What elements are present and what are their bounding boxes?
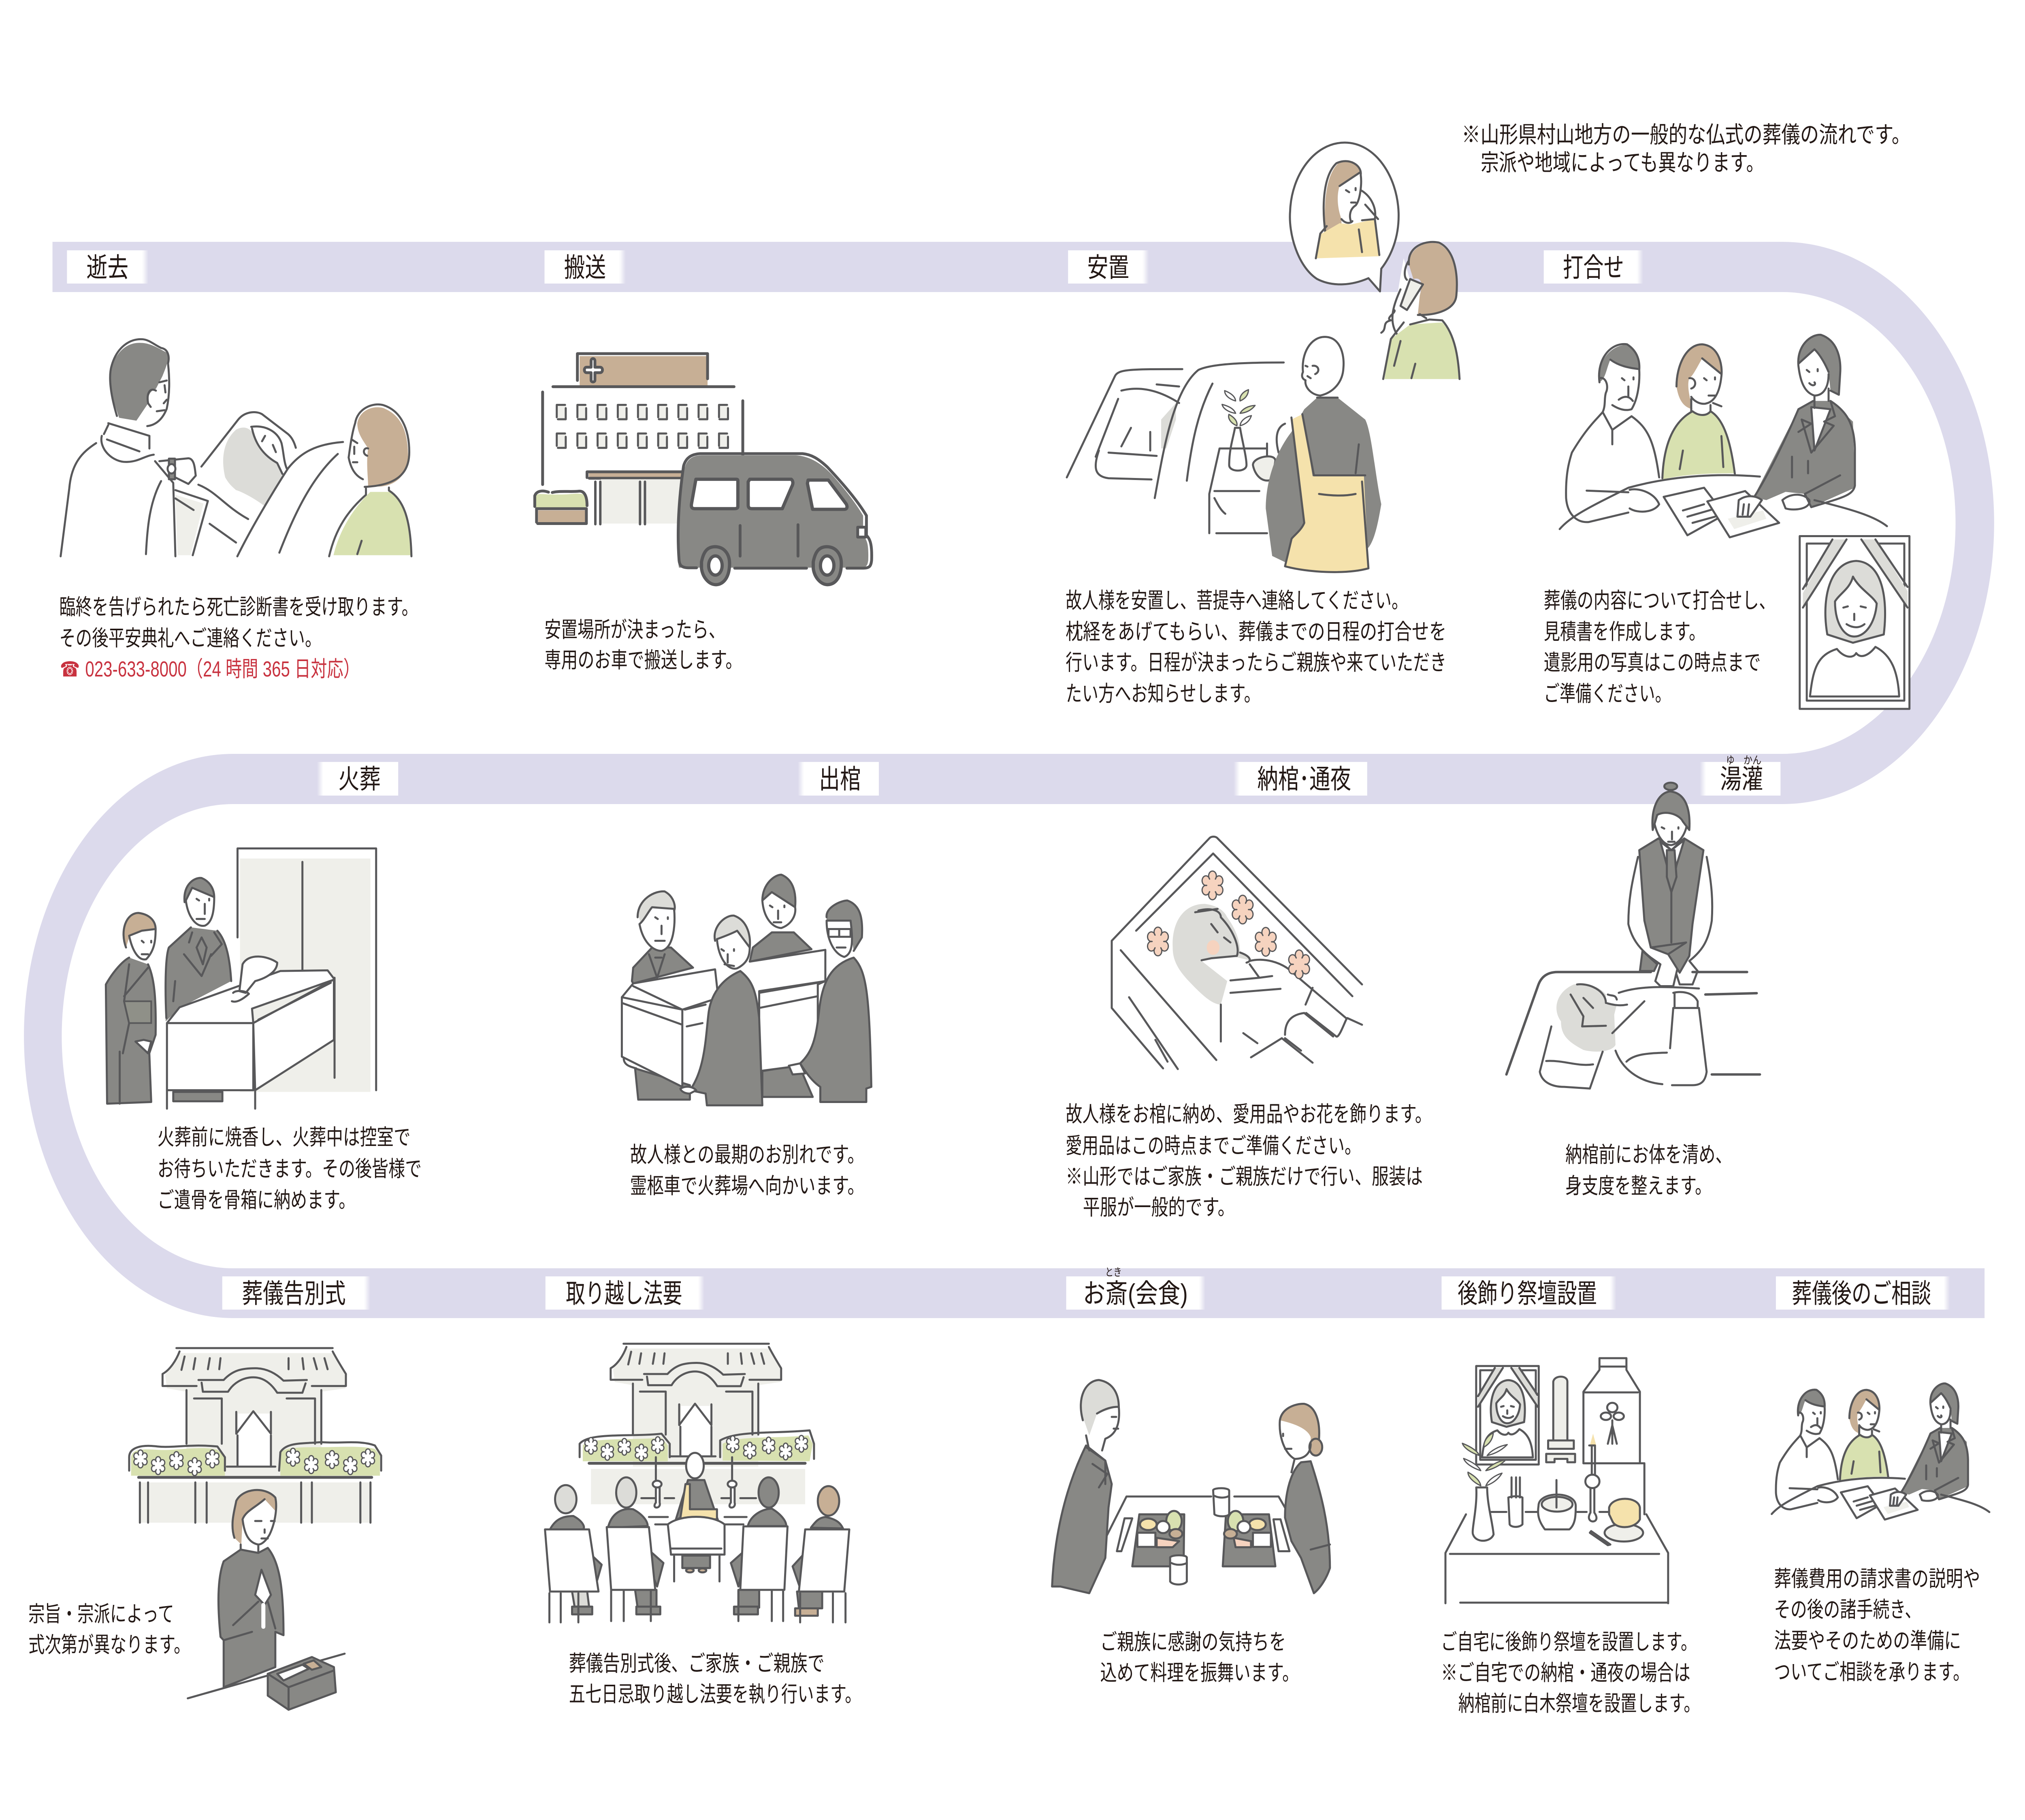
text: arrangements: 見積書を作成します。 [1544, 620, 1705, 644]
panel: 火葬 [106, 762, 422, 1212]
text: cremation [158, 1126, 422, 1212]
text: ritual washing [1565, 1143, 1732, 1198]
step label: 湯灌 with ruby: ゆ [1726, 754, 1735, 767]
text: ritual washing: 身支度を整えます。 [1565, 1174, 1712, 1198]
note: general flow of a Buddhist funeral: 宗派や地域によっても異なります。 [1481, 149, 1764, 175]
text: encoffining [1066, 1103, 1432, 1220]
text: consultation: その後の諸手続き、 [1774, 1598, 1921, 1622]
text: consultation: 法要やそのための準備に [1774, 1629, 1961, 1653]
illustration: body in coffin with flowers [1112, 836, 1362, 1069]
illustration: altar and woman praying [129, 1348, 381, 1710]
illustration: hospital and van [535, 354, 872, 585]
step label: 逝去: 逝去 [86, 253, 128, 283]
note: general flow of a Buddhist funeral: ※山形県村山地方の一般的な仏式の葬儀の流れです。 [1462, 122, 1910, 147]
step label: 葬儀告別式 [222, 1276, 371, 1310]
step label: 逝去 [67, 250, 149, 284]
text: arrangements [1544, 589, 1776, 706]
text: departure: 故人様との最期のお別れです。 [630, 1143, 864, 1167]
illustration: portrait on home altar [1476, 1366, 1539, 1464]
text: home altar: ご自宅に後飾り祭壇を設置します。 [1441, 1630, 1697, 1654]
panel: 逝去 [59, 250, 418, 681]
illustration: doctor, patient and family [61, 339, 411, 556]
text: encoffining: 故人様をお棺に納め、愛用品やお花を飾ります。 [1066, 1103, 1432, 1127]
panel: お斎 [1052, 1266, 1330, 1685]
panel: 出棺 [622, 762, 879, 1198]
text: departure: 霊柩車で火葬場へ向かいます。 [630, 1174, 864, 1198]
panel: 納棺・通夜 [1066, 762, 1432, 1220]
illustration: meal with the family [1052, 1380, 1330, 1593]
step label: 葬儀後のご相談: 葬儀後のご相談 [1792, 1279, 1931, 1309]
panel: 打合せ [1544, 250, 1910, 709]
panel: 湯灌 [1507, 754, 1780, 1198]
text: encoffining: 愛用品はこの時点までご準備ください。 [1066, 1134, 1361, 1158]
text: funeral ceremony: 宗旨・宗派によって [28, 1602, 174, 1626]
panel: 搬送 [535, 250, 872, 672]
text: transport: 専用のお車で搬送します。 [545, 649, 742, 672]
text: death notice [59, 595, 418, 681]
step label: 湯灌 with ruby: かん [1744, 754, 1761, 767]
step label: 納棺・通夜 [1234, 762, 1367, 796]
text: meal: 込めて料理を振舞います。 [1100, 1661, 1299, 1685]
text: laying out [1066, 589, 1447, 706]
text: cremation: 火葬前に焼香し、火葬中は控室で [158, 1126, 411, 1150]
step label: お斎（会食） with ruby: とき [1105, 1266, 1122, 1279]
text: laying out: 行います。日程が決まったらご親族や来ていただき [1066, 651, 1447, 675]
illustration: cremation farewell [106, 849, 376, 1109]
step label: お斎（会食） with ruby: お斎(会食) [1083, 1279, 1188, 1309]
step label: 後飾り祭壇設置: 後飾り祭壇設置 [1458, 1279, 1597, 1309]
text: cremation: お待ちいただきます。その後皆様で [158, 1157, 422, 1181]
text: arrangements: 葬儀の内容について打合せし、 [1544, 589, 1776, 613]
text: laying out: たい方へお知らせします。 [1066, 682, 1260, 706]
step label: 出棺: 出棺 [819, 765, 861, 794]
panel: 葬儀後のご相談 [1772, 1276, 1989, 1684]
text: cremation: ご遺骨を骨箱に納めます。 [158, 1188, 355, 1212]
step label: 取り越し法要 [546, 1276, 704, 1310]
illustration: memorial service seating [545, 1344, 849, 1622]
text: transport: 安置場所が決まったら、 [545, 618, 725, 642]
panel: 取り越し法要 [545, 1276, 861, 1707]
text: laying out: 枕経をあげてもらい、葬儀までの日程の打合せを [1066, 620, 1447, 644]
illustration: after-funeral consultation [1772, 1383, 1989, 1519]
text: home altar: 納棺前に白木祭壇を設置します。 [1458, 1692, 1700, 1716]
text: death notice: 臨終を告げられたら死亡診断書を受け取ります。 [59, 595, 418, 619]
text: home altar: ※ご自宅での納棺・通夜の場合は [1441, 1661, 1690, 1685]
text: arrangements: 遺影用の写真はこの時点まで [1544, 651, 1761, 675]
step label: 出棺 [798, 762, 879, 796]
illustration: monk, bed and phone call [1067, 143, 1460, 572]
text: consultation: ついてご相談を承ります。 [1774, 1660, 1970, 1684]
step label: 搬送: 搬送 [564, 253, 606, 283]
text: funeral ceremony: 式次第が異なります。 [28, 1633, 190, 1657]
panel: 後飾り祭壇設置 [1441, 1276, 1700, 1716]
text: meal [1100, 1630, 1299, 1685]
step label: お斎（会食） with ruby [1066, 1266, 1205, 1310]
step label: 安置: 安置 [1087, 253, 1129, 283]
step label: 湯灌 with ruby: 湯灌 [1720, 765, 1763, 794]
text: departure [630, 1143, 864, 1198]
step label: 打合せ: 打合せ [1563, 253, 1624, 283]
text: transport [545, 618, 742, 672]
text: memorial service [569, 1652, 861, 1707]
panel: 葬儀告別式 [28, 1276, 381, 1710]
step label: 葬儀告別式: 葬儀告別式 [242, 1279, 346, 1309]
illustration: portrait photo [1800, 536, 1910, 709]
text: consultation: 葬儀費用の請求書の説明や [1774, 1567, 1980, 1591]
text: arrangements: ご準備ください。 [1544, 682, 1671, 706]
text: meal: ご親族に感謝の気持ちを [1100, 1630, 1286, 1654]
illustration: home altar [1445, 1358, 1668, 1603]
illustration: carrying the coffin [622, 875, 871, 1105]
text: encoffining: 平服が一般的です。 [1083, 1196, 1235, 1220]
text: memorial service: 五七日忌取り越し法要を執り行います。 [569, 1683, 861, 1707]
step label: 湯灌 with ruby [1700, 754, 1780, 796]
illustration: meeting at a table [1560, 335, 1887, 538]
step label: 取り越し法要: 取り越し法要 [566, 1279, 682, 1309]
step label: 搬送 [545, 250, 626, 284]
text: laying out: 故人様を安置し、菩提寺へ連絡してください。 [1066, 589, 1408, 613]
text: death notice: 023-633-8000（24 時間 365 日対応） [85, 657, 360, 681]
illustration: washing the body [1507, 783, 1760, 1088]
flow band [24, 242, 1994, 1318]
step label: 打合せ [1544, 250, 1643, 284]
text: funeral ceremony [28, 1602, 190, 1657]
text: death notice: その後平安典礼へご連絡ください。 [59, 627, 321, 651]
step label: 火葬 [317, 762, 398, 796]
note: general flow of a Buddhist funeral [1462, 122, 1910, 175]
text: home altar [1441, 1630, 1700, 1716]
text: memorial service: 葬儀告別式後、ご家族・ご親族で [569, 1652, 825, 1676]
text: consultation [1774, 1567, 1980, 1684]
step label: 火葬: 火葬 [338, 765, 381, 794]
text: death notice: ☎ [60, 657, 80, 681]
text: encoffining: ※山形ではご家族・ご親族だけで行い、服装は [1066, 1165, 1423, 1189]
text: ritual washing: 納棺前にお体を清め、 [1565, 1143, 1732, 1167]
step label: 納棺・通夜: 納棺･通夜 [1257, 765, 1351, 794]
step label: 安置 [1068, 250, 1149, 284]
panel: 安置 [1066, 143, 1460, 706]
